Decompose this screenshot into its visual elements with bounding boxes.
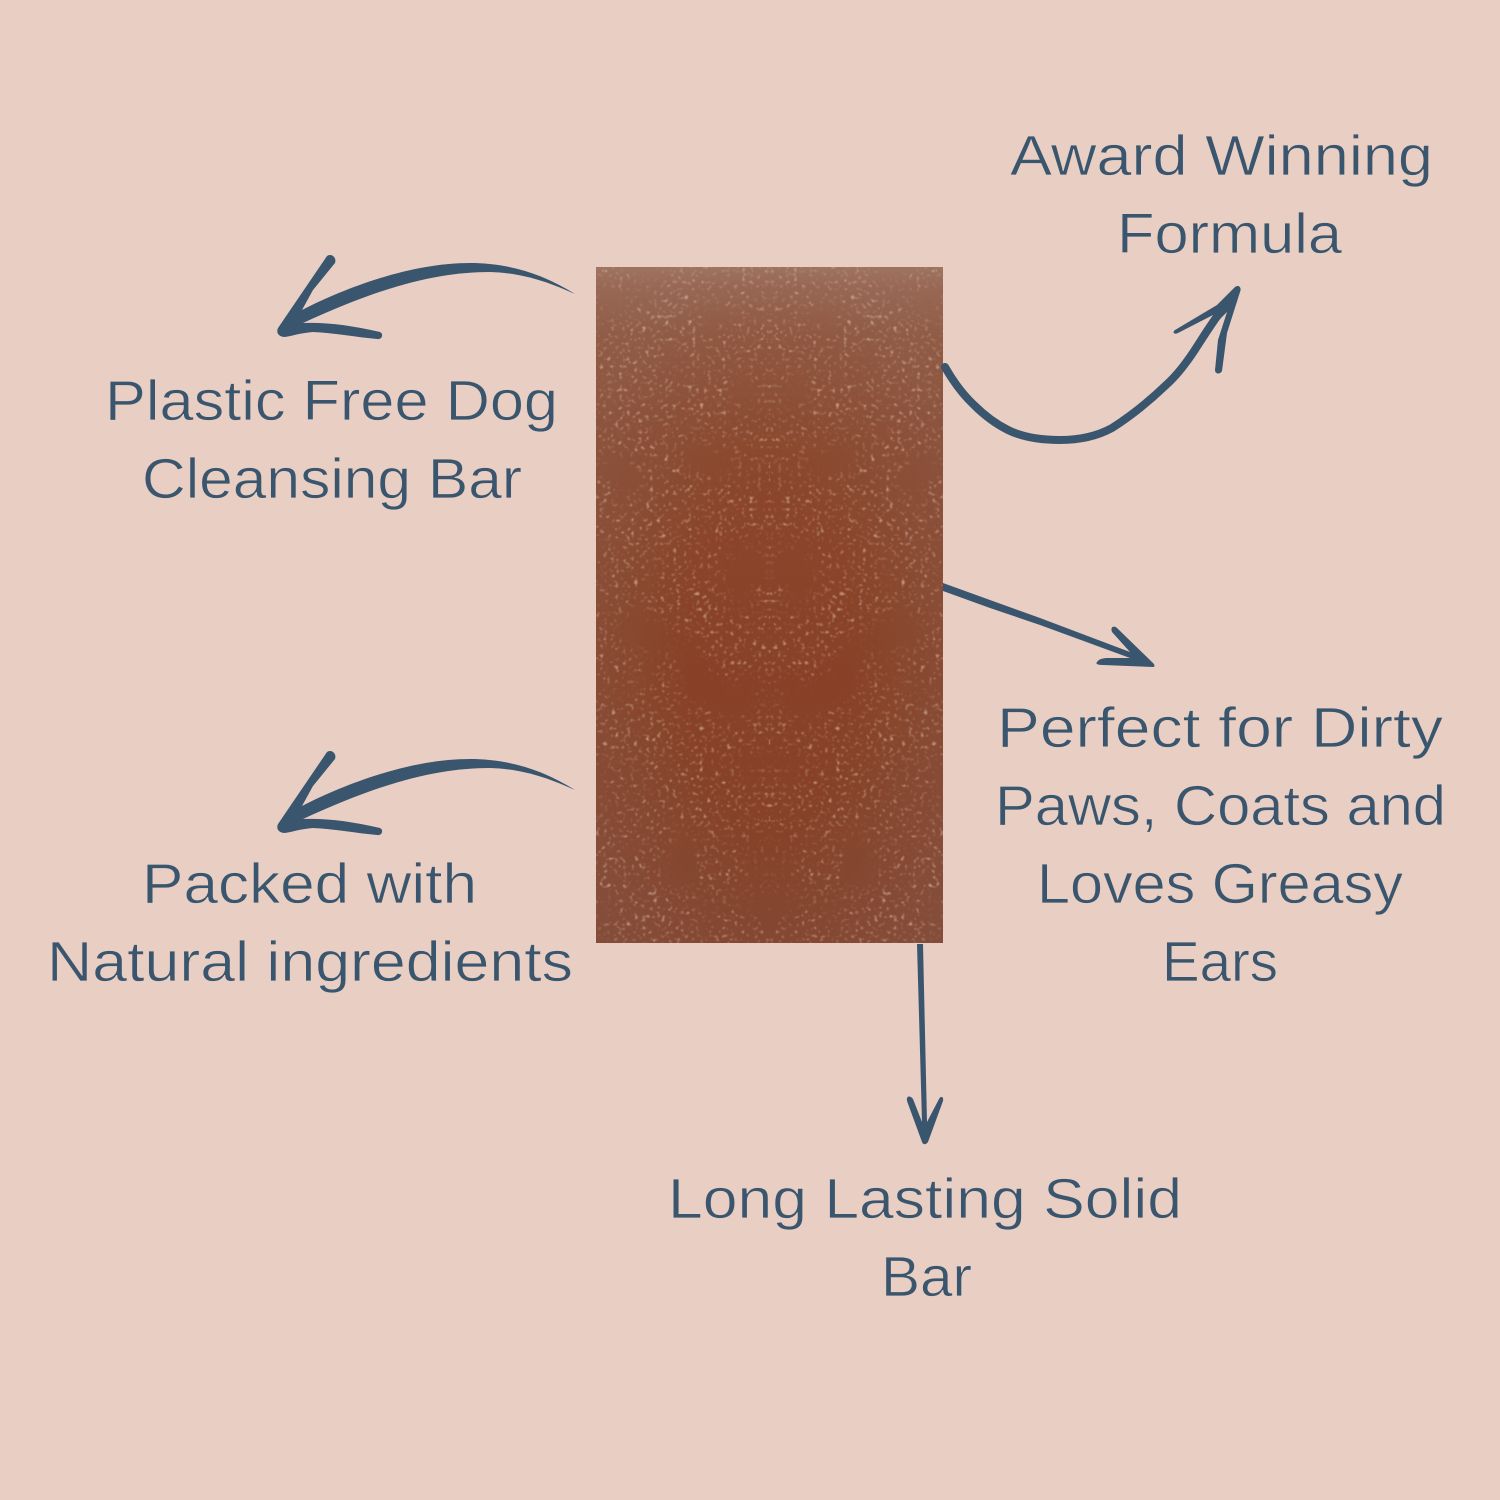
label: plastic free: Plastic Free Dog xyxy=(105,369,558,433)
label: perfect for: Loves Greasy xyxy=(1037,852,1404,916)
arrow: to perfect for label xyxy=(943,583,1154,667)
label: perfect for: Perfect for Dirty xyxy=(997,696,1444,760)
arrow: to plastic free label xyxy=(277,255,575,339)
label: natural ingredients xyxy=(47,852,573,994)
label: award winning: Award Winning xyxy=(1010,124,1433,188)
label: award winning xyxy=(1010,124,1433,266)
arrow: to award winning label xyxy=(945,286,1241,440)
soap bar xyxy=(596,267,943,943)
label: plastic free: Cleansing Bar xyxy=(142,447,522,511)
label: long lasting: Bar xyxy=(881,1245,972,1309)
label: long lasting xyxy=(668,1167,1182,1309)
label: perfect for xyxy=(995,696,1446,994)
label: award winning: Formula xyxy=(1117,202,1342,266)
label: natural ingredients: Packed with xyxy=(142,852,477,916)
arrow: to natural ingredients label xyxy=(277,751,575,835)
label: plastic free xyxy=(105,369,558,511)
label: perfect for: Paws, Coats and xyxy=(995,774,1446,838)
arrow: to long lasting label xyxy=(907,944,943,1144)
label: perfect for: Ears xyxy=(1162,930,1278,994)
label: long lasting: Long Lasting Solid xyxy=(668,1167,1182,1231)
label: natural ingredients: Natural ingredients xyxy=(47,930,573,994)
